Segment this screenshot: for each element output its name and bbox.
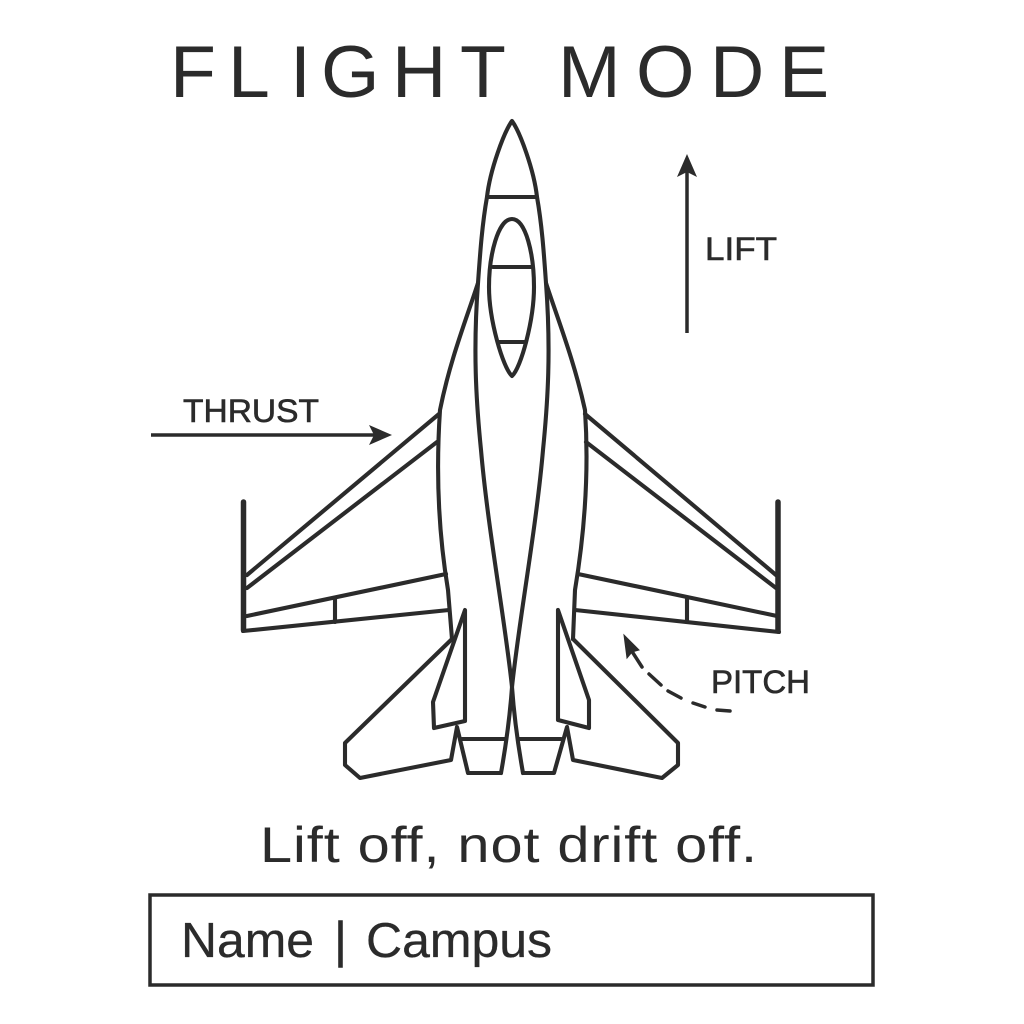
aircraft diagram bbox=[243, 121, 779, 778]
fuselage outline bbox=[438, 197, 487, 639]
left tail bbox=[345, 610, 505, 778]
name and campus box bbox=[150, 895, 873, 985]
right tail bbox=[518, 610, 678, 778]
pitch arrow bbox=[624, 635, 730, 711]
tagline: Lift off, not drift off. bbox=[260, 817, 758, 873]
pitch label: PITCH bbox=[711, 664, 810, 700]
divider bar: | bbox=[334, 912, 347, 968]
thrust arrow bbox=[151, 425, 392, 445]
name text: Name bbox=[181, 914, 314, 968]
left wing bbox=[243, 414, 449, 631]
canopy bbox=[489, 219, 534, 376]
thrust label: THRUST bbox=[183, 393, 319, 429]
right wing bbox=[575, 414, 779, 632]
lift label: LIFT bbox=[705, 231, 777, 267]
inner fuselage lines bbox=[475, 283, 523, 773]
nose cone bbox=[487, 121, 537, 197]
campus text: Campus bbox=[366, 914, 552, 968]
title: FLIGHT MODE bbox=[170, 31, 829, 113]
lift arrow bbox=[677, 154, 697, 333]
